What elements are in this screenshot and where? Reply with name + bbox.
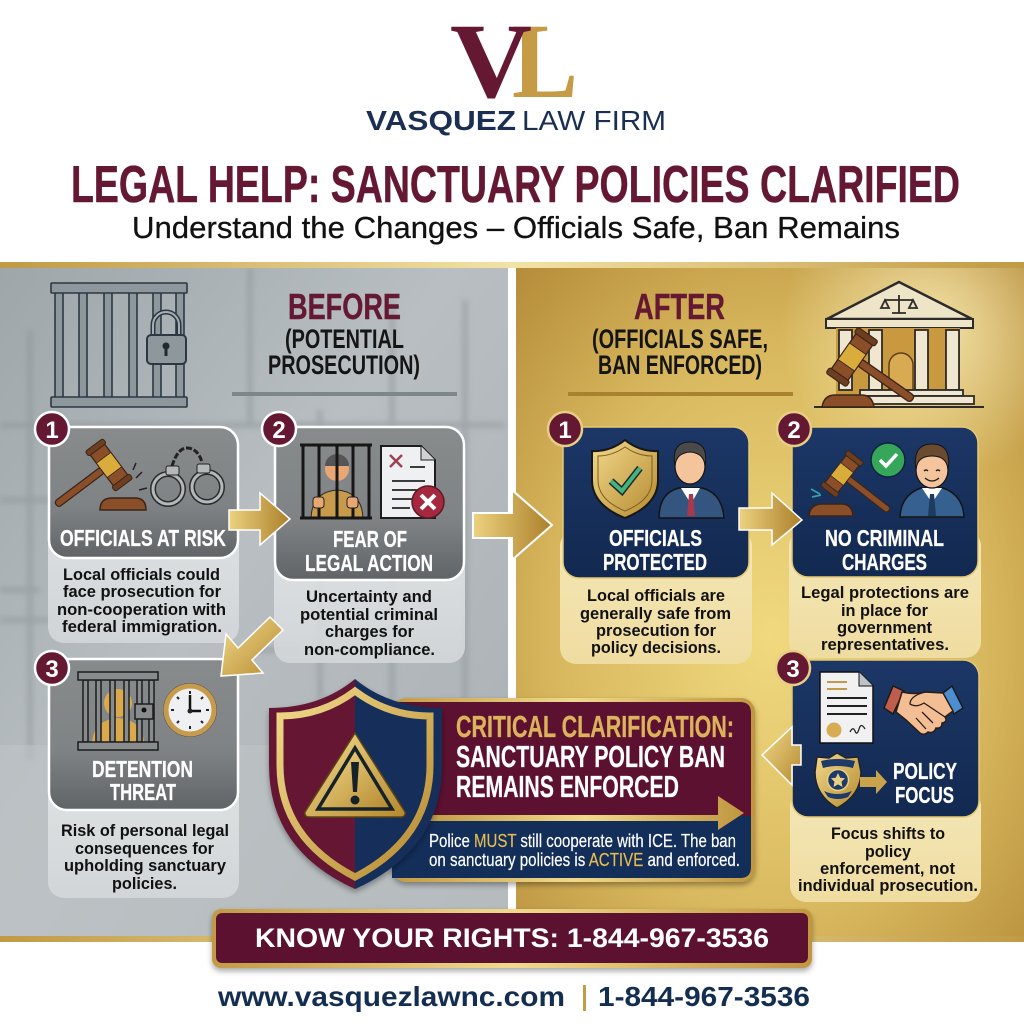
panel: before step 1: face prosecution for — [63, 583, 222, 601]
gold strip bottom — [0, 936, 1024, 942]
subtitle: Understand the Changes – Officials Safe, Ban Remains — [132, 210, 900, 245]
body text: on sanctuary policies is ACTIVE and enforced. — [429, 849, 740, 870]
step badges: 2 — [272, 417, 286, 444]
callout: critical clarification: SANCTUARY POLICY BAN — [456, 739, 725, 774]
panel: before step 1: non-cooperation with — [57, 601, 226, 619]
panel: after step 1: generally safe from — [580, 605, 731, 623]
panel: before step 2 — [274, 427, 465, 663]
logo: V — [450, 3, 532, 121]
heading: after: AFTER — [634, 286, 725, 327]
arrow: step 2 to step 3 — [221, 617, 283, 676]
panel: before step 1 — [41, 427, 239, 643]
icon: person behind bars and rejected document — [300, 445, 444, 518]
arrow: policy focus to callout — [762, 727, 801, 785]
heading: after: (OFFICIALS SAFE, — [592, 324, 768, 354]
panel: after step 3: policy — [865, 843, 912, 861]
panel: after step 3: individual prosecution. — [798, 877, 978, 895]
step badges: 1 — [558, 417, 572, 444]
panel: before step 2: Uncertainty and — [306, 588, 432, 606]
icon: courthouse with gavel — [814, 282, 984, 422]
step badges: 3 — [45, 656, 59, 683]
step badges: 2 — [787, 417, 801, 444]
icon: jail cell with padlock — [51, 283, 187, 407]
panel: after step 3: POLICY — [893, 758, 957, 784]
panel: after step 2: CHARGES — [842, 549, 927, 575]
panel: after step 1: PROTECTED — [603, 549, 707, 575]
icon: detention cell and clock — [78, 672, 216, 750]
panel: after step 2: in place for — [841, 602, 929, 620]
panel: after step 1: OFFICIALS — [609, 525, 702, 551]
call to action bar: KNOW YOUR RIGHTS: 1-844-967-3536 — [255, 923, 769, 953]
icon: signed document — [820, 672, 873, 743]
body text — [429, 830, 740, 870]
panel: after step 2: government — [837, 619, 933, 637]
heading: before: (POTENTIAL — [285, 324, 404, 354]
panel: after background — [516, 262, 1024, 942]
panel: after step 1: policy decisions. — [591, 639, 721, 657]
icon: shield and official — [592, 440, 724, 518]
footer contact — [217, 981, 810, 1012]
body text: Police MUST still cooperate with ICE. The ban — [429, 830, 736, 851]
panel: after step 3: FOCUS — [895, 782, 954, 808]
panel: after step 2: representatives. — [821, 636, 949, 654]
panel: after step 2: Legal protections are — [801, 584, 969, 602]
panel: before step 3: Risk of personal legal — [61, 822, 229, 840]
panel: after step 1: prosecution for — [596, 622, 717, 640]
footer contact: www.vasquezlawnc.com — [217, 981, 565, 1012]
panel: before step 2: charges for — [325, 623, 415, 641]
panel: before step 1: Local officials could — [63, 566, 220, 584]
footer contact: 1-844-967-3536 — [598, 981, 810, 1012]
panel: after step 2: NO CRIMINAL — [825, 525, 944, 551]
panel: after step 3: enforcement, not — [820, 860, 955, 878]
panel: after step 1: Local officials are — [587, 587, 725, 605]
heading: after: BAN ENFORCED) — [598, 350, 762, 380]
logo: L — [512, 3, 578, 121]
heading: before — [268, 286, 420, 380]
step badges: 1 — [45, 417, 59, 444]
step badges: 3 — [786, 656, 800, 683]
panel: before step 2: non-compliance. — [304, 641, 435, 659]
callout: critical clarification: REMAINS ENFORCED — [456, 769, 679, 804]
panel: before step 1: federal immigration. — [62, 618, 222, 636]
panel: before step 3: upholding sanctuary — [64, 857, 227, 875]
panel: before step 2: FEAR OF — [333, 526, 407, 552]
heading: after — [592, 286, 768, 380]
panel: before step 2: potential criminal — [300, 606, 438, 624]
heading: before: BEFORE — [288, 286, 401, 327]
panel: after step 2 — [789, 427, 981, 658]
panel: before step 3: THREAT — [110, 779, 176, 805]
panel: before step 1: OFFICIALS AT RISK — [60, 525, 226, 551]
banner — [392, 698, 755, 882]
panel: before step 2: LEGAL ACTION — [305, 550, 433, 576]
icon: police badge — [815, 753, 861, 808]
panel: before step 3: policies. — [112, 875, 177, 893]
icon: warning shield — [269, 679, 442, 889]
call to action bar — [212, 909, 812, 968]
panel: after step 1 — [560, 427, 752, 664]
logo: VASQUEZ — [366, 105, 516, 136]
arrow: badge to policy focus — [860, 770, 887, 794]
heading: before: PROSECUTION) — [268, 350, 420, 380]
panel: before step 3: consequences for — [75, 840, 215, 858]
panel: before step 3 — [48, 659, 239, 898]
step badges — [35, 412, 811, 685]
arrow: before to after — [473, 490, 552, 560]
gold strip top — [0, 262, 1024, 268]
icon: gavel, green check and smiling official — [809, 443, 964, 528]
arrow: divider — [425, 796, 744, 830]
panel: before step 3: DETENTION — [92, 756, 193, 782]
arrow: step 1 to step 2 — [229, 493, 290, 545]
icon: handshake — [884, 686, 963, 734]
panel: after step 3: Focus shifts to — [831, 825, 945, 843]
logo — [366, 3, 666, 136]
callout: critical clarification: CRITICAL CLARIFICATION: — [456, 709, 734, 744]
callout: critical clarification — [269, 679, 755, 889]
panel: after step 3 — [790, 660, 981, 902]
icon: gavel and handcuffs — [41, 438, 222, 525]
arrow: after step 1 to step 2 — [739, 493, 802, 545]
logo: LAW FIRM — [522, 105, 666, 136]
panel: before background — [0, 262, 508, 942]
